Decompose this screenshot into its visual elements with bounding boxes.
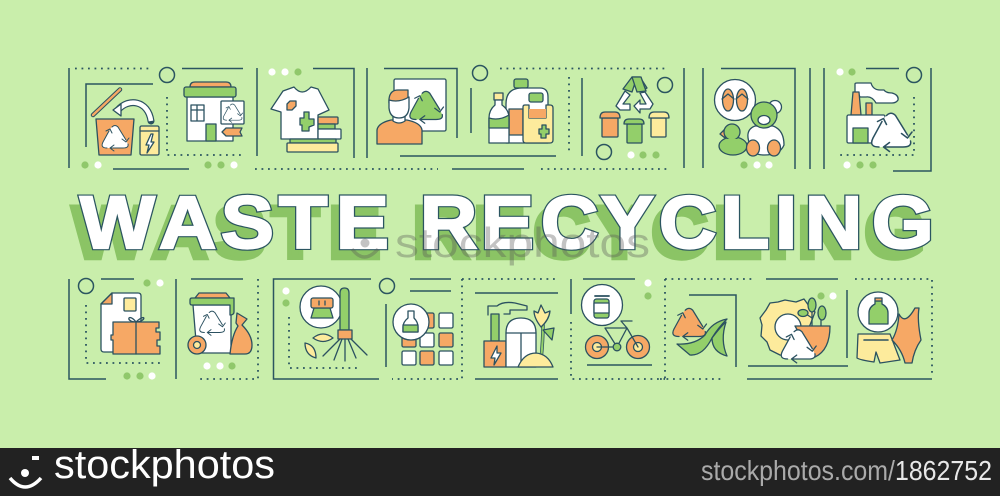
icon: flip-flops, teddy bear and rubber duck [714, 80, 784, 156]
watermark: stockphotos [395, 219, 650, 266]
icon: biofuel plant with silo and wheat [484, 302, 554, 367]
title: WASTE RECYCLING [80, 182, 934, 264]
icon: recycling wheelie bin and garbage bag [188, 293, 252, 354]
icon: recycling symbol and three cups [600, 77, 669, 143]
icon: swimwear from recycled bottle [857, 292, 921, 363]
icon: bottle and mosaic tiles [393, 304, 453, 365]
icon: gear, plant pot and recycling symbol [760, 298, 830, 363]
icon: rake, leaves and broom [300, 286, 367, 361]
icon: factory with recycling symbol [847, 83, 912, 152]
icon: recycling bin and battery [93, 90, 159, 155]
icon: document and gift box [101, 293, 160, 354]
footer image id: stockphotos.com/1862752 [701, 455, 992, 486]
icon: bicycle and can [582, 284, 650, 358]
title: WASTE RECYCLING [80, 182, 934, 264]
icon: T-shirt and stack of clothes [271, 87, 341, 152]
footer logo mark [10, 456, 41, 487]
icon: plastic bottle, jug and bag [489, 79, 553, 143]
footer bar [0, 443, 1000, 496]
title shadow: WASTE RECYCLING [72, 192, 926, 274]
footer brand: stockphotos [54, 443, 275, 487]
icon: recycling symbol and banana peel [673, 308, 727, 356]
icon: man with recycling poster [377, 79, 446, 144]
icon: recycling shop building [184, 82, 244, 141]
